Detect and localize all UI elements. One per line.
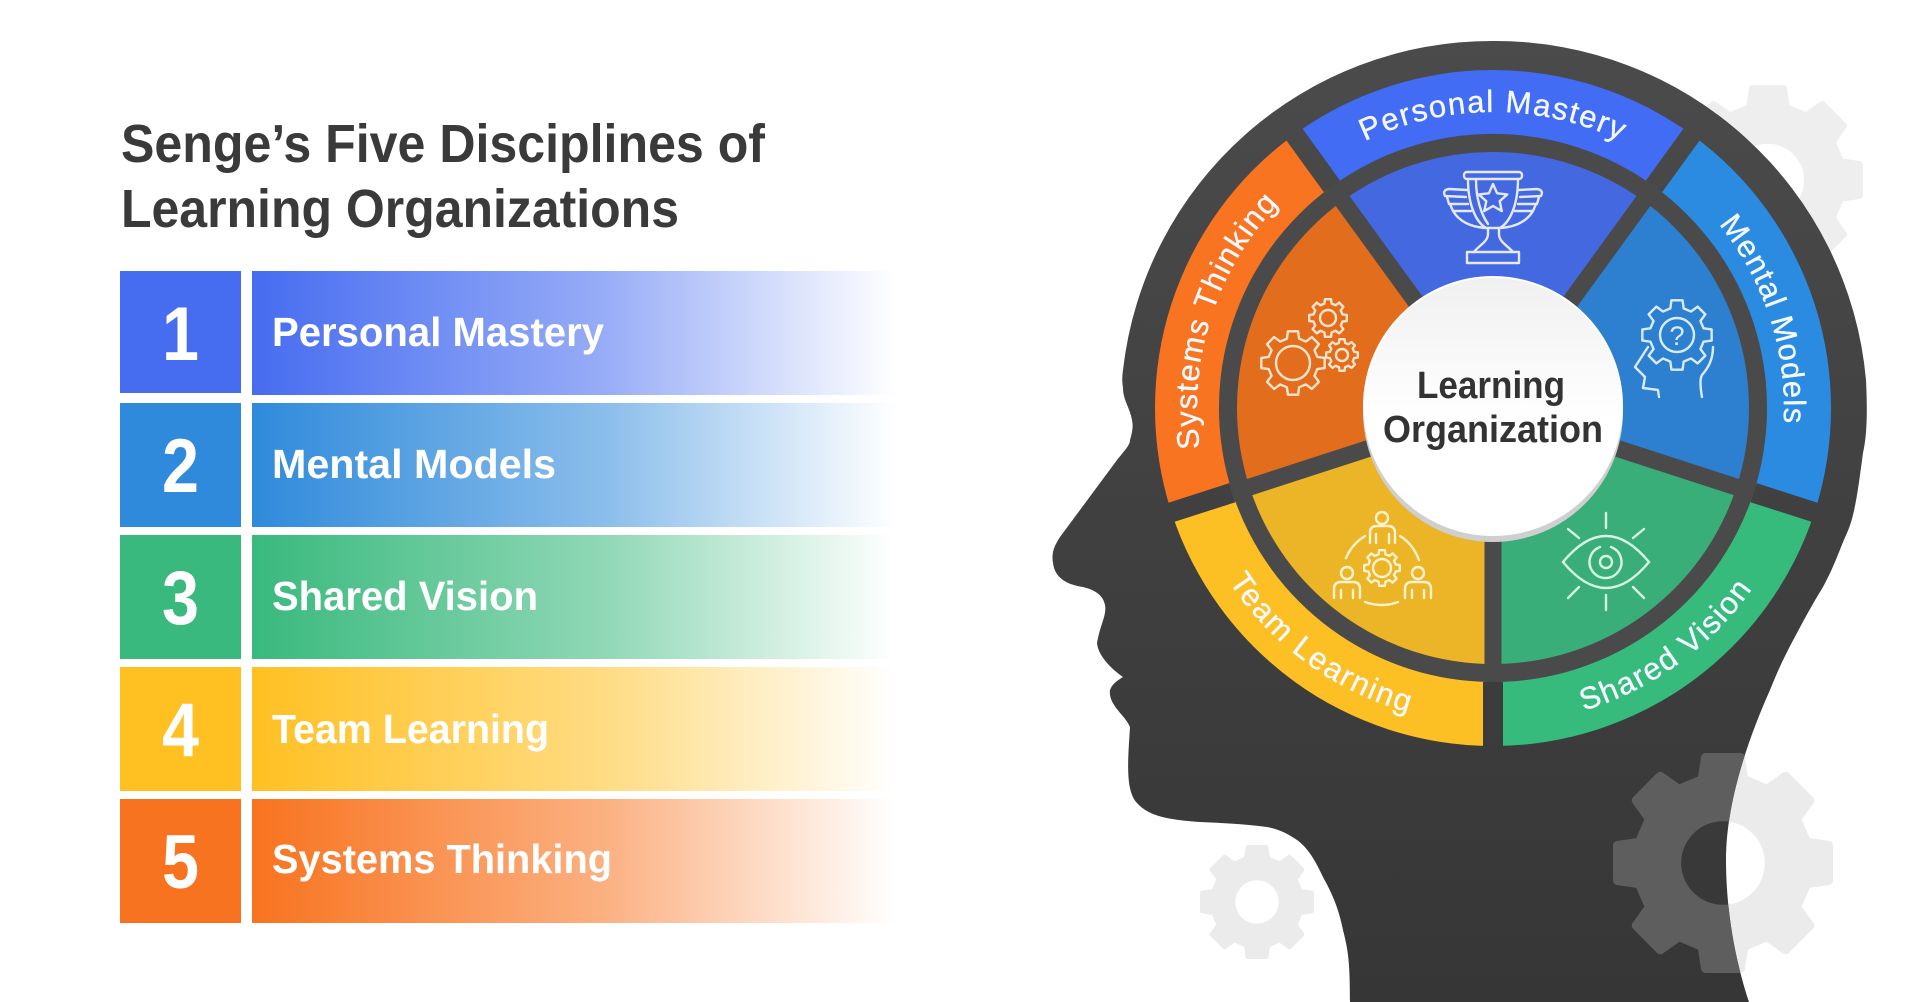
row 4: Team Learning: 4 — [162, 688, 199, 773]
gear: bottom right inside head — [1613, 753, 1745, 973]
gear: bottom left — [1202, 847, 1312, 957]
wheel spokes — [1163, 127, 1823, 754]
panel: inner wedge segments — [1237, 152, 1749, 664]
label: Team Learning: Team Learning — [1233, 570, 1412, 717]
inner wedge: Shared Vision — [1493, 408, 1736, 664]
row 2: Mental Models: 2 — [162, 424, 199, 509]
inner wedge: Team Learning — [1250, 408, 1493, 664]
outer segment: Mental Models — [1654, 135, 1831, 512]
label: Shared Vision: Shared Vision — [1580, 582, 1752, 709]
row 5: Systems Thinking: 5 — [162, 820, 199, 905]
gear: top right — [1677, 89, 1859, 271]
row 3: Shared Vision — [120, 535, 895, 659]
row 1: Personal Mastery: 1 — [162, 292, 199, 377]
center circle: Learning Organization: Learning — [1417, 365, 1565, 407]
wheel inner disc — [1219, 134, 1767, 682]
icon: gear in head with question mark: ? — [1669, 321, 1685, 351]
background gears behind head — [1202, 89, 1859, 969]
row 1: Personal Mastery: Personal Mastery — [272, 309, 604, 355]
row 4: Team Learning — [120, 667, 895, 791]
label: Systems Thinking: Systems Thinking — [1176, 194, 1280, 448]
outer segment: Team Learning — [1172, 493, 1493, 746]
row 5: Systems Thinking: Systems Thinking — [272, 836, 612, 882]
gear: bottom right light part — [1617, 757, 1829, 969]
row 2: Mental Models: Mental Models — [272, 441, 556, 487]
panel: outer ring segments — [1155, 70, 1831, 746]
row 2: Mental Models — [120, 403, 895, 527]
icon: team around gear — [1334, 512, 1431, 605]
icon: gear in head with question mark — [1635, 300, 1713, 397]
row 4: Team Learning: Team Learning — [272, 706, 549, 752]
title: Senge’s Five Disciplines of — [121, 114, 766, 174]
label: Personal Mastery: Personal Mastery — [1358, 89, 1627, 142]
row 3: Shared Vision: Shared Vision — [272, 573, 538, 619]
center circle: Learning Organization — [1363, 277, 1623, 542]
outer ring labels — [1176, 89, 1807, 717]
label: Mental Models: Mental Models — [1720, 213, 1807, 422]
head silhouette — [1052, 41, 1867, 1002]
center circle: Learning Organization: Organization — [1383, 409, 1603, 451]
title — [121, 114, 766, 239]
row 1: Personal Mastery — [120, 271, 895, 395]
inner wedge: Systems Thinking — [1237, 201, 1493, 487]
outer segment: Shared Vision — [1493, 493, 1814, 746]
outer segment: Personal Mastery — [1294, 70, 1692, 186]
inner wedge: Mental Models — [1493, 201, 1749, 487]
icon: trophy — [1444, 172, 1542, 263]
outer segment: Systems Thinking — [1155, 135, 1332, 512]
row 5: Systems Thinking — [120, 799, 895, 923]
inner wedge: Personal Mastery — [1342, 152, 1644, 408]
title: Learning Organizations — [121, 179, 679, 239]
panel: numbered list of disciplines — [120, 271, 895, 923]
row 3: Shared Vision: 3 — [162, 556, 199, 641]
icon: three gears — [1261, 299, 1358, 395]
icon: eye — [1563, 513, 1649, 610]
wheel diagram — [1155, 70, 1831, 746]
